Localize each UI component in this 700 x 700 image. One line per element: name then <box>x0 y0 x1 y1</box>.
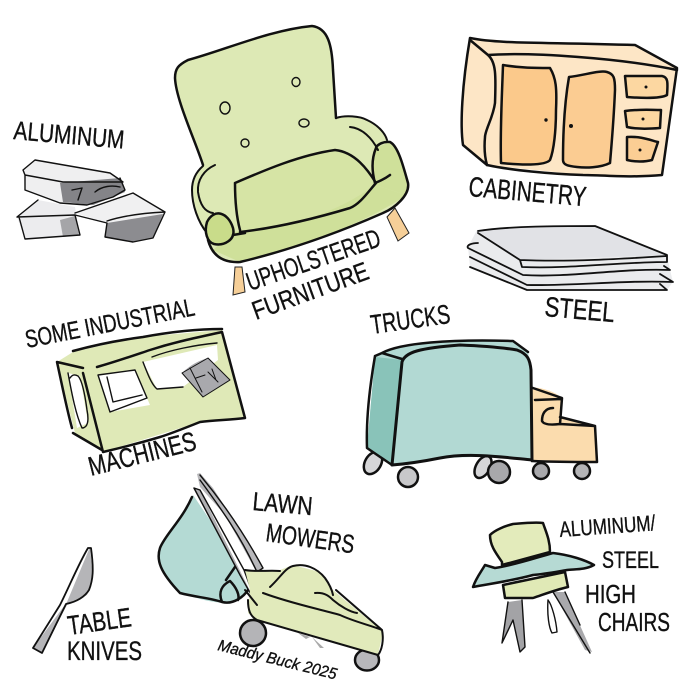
mower body <box>245 565 383 655</box>
label: upholstered furniture: FURNITURE <box>248 256 373 326</box>
icon: table knife <box>33 547 93 653</box>
mower handle <box>193 488 257 605</box>
label: cabinetry: CABINETRY <box>467 171 588 212</box>
chair buttons <box>220 78 309 147</box>
icon: lawn mower <box>159 473 383 670</box>
icon: upholstered armchair <box>175 26 409 295</box>
label: table knives: KNIVES <box>67 636 142 666</box>
chair line work <box>175 26 336 165</box>
high chair back <box>490 523 550 565</box>
label: table knives: TABLE <box>66 602 133 641</box>
signature: Maddy Buck 2025 <box>216 637 339 683</box>
high chair seat <box>503 572 568 598</box>
label: machines: MACHINES <box>85 426 199 482</box>
label: lawn mowers: MOWERS <box>264 517 356 559</box>
machine windows <box>68 343 218 428</box>
front rail <box>213 185 406 262</box>
label: steel: STEEL <box>543 291 616 328</box>
label: aluminum: ALUMINUM <box>12 115 126 155</box>
seat cushion <box>235 150 376 232</box>
icon: industrial machine <box>57 329 245 452</box>
label: trucks: TRUCKS <box>369 299 452 340</box>
label: some industrial: SOME INDUSTRIAL <box>23 294 197 354</box>
high chair tray <box>473 553 594 587</box>
chair silhouette <box>175 26 408 262</box>
icon: steel sheets <box>468 226 673 290</box>
chair legs <box>233 208 409 295</box>
cabinet drawers <box>625 76 667 162</box>
label: lawn mowers <box>251 486 356 559</box>
label: upholstered furniture: UPHOLSTERED <box>242 223 384 297</box>
label: upholstered furniture <box>242 223 384 326</box>
label: aluminum steel high chairs <box>559 510 670 637</box>
label: aluminum steel high chairs: STEEL <box>602 547 659 574</box>
label: aluminum steel high chairs: CHAIRS <box>598 607 670 637</box>
label: lawn mowers: LAWN <box>251 486 314 521</box>
label: aluminum steel high chairs: ALUMINUM/ <box>559 510 657 542</box>
mower wheels <box>240 620 379 670</box>
truck cargo box <box>367 341 532 465</box>
high chair legs <box>502 592 592 653</box>
icon: high chair <box>473 523 594 653</box>
truck cab <box>530 387 597 462</box>
icon: aluminum ingots <box>17 160 165 242</box>
label: aluminum steel high chairs: HIGH <box>585 579 636 609</box>
mower grass bag <box>159 495 248 603</box>
truck wheels <box>360 449 590 487</box>
icon: truck <box>360 340 597 487</box>
machine keypad <box>182 358 230 397</box>
label: table knives <box>66 602 142 666</box>
cabinet doors <box>501 65 615 168</box>
right arm front <box>372 142 408 195</box>
icon: cabinet <box>462 38 677 176</box>
